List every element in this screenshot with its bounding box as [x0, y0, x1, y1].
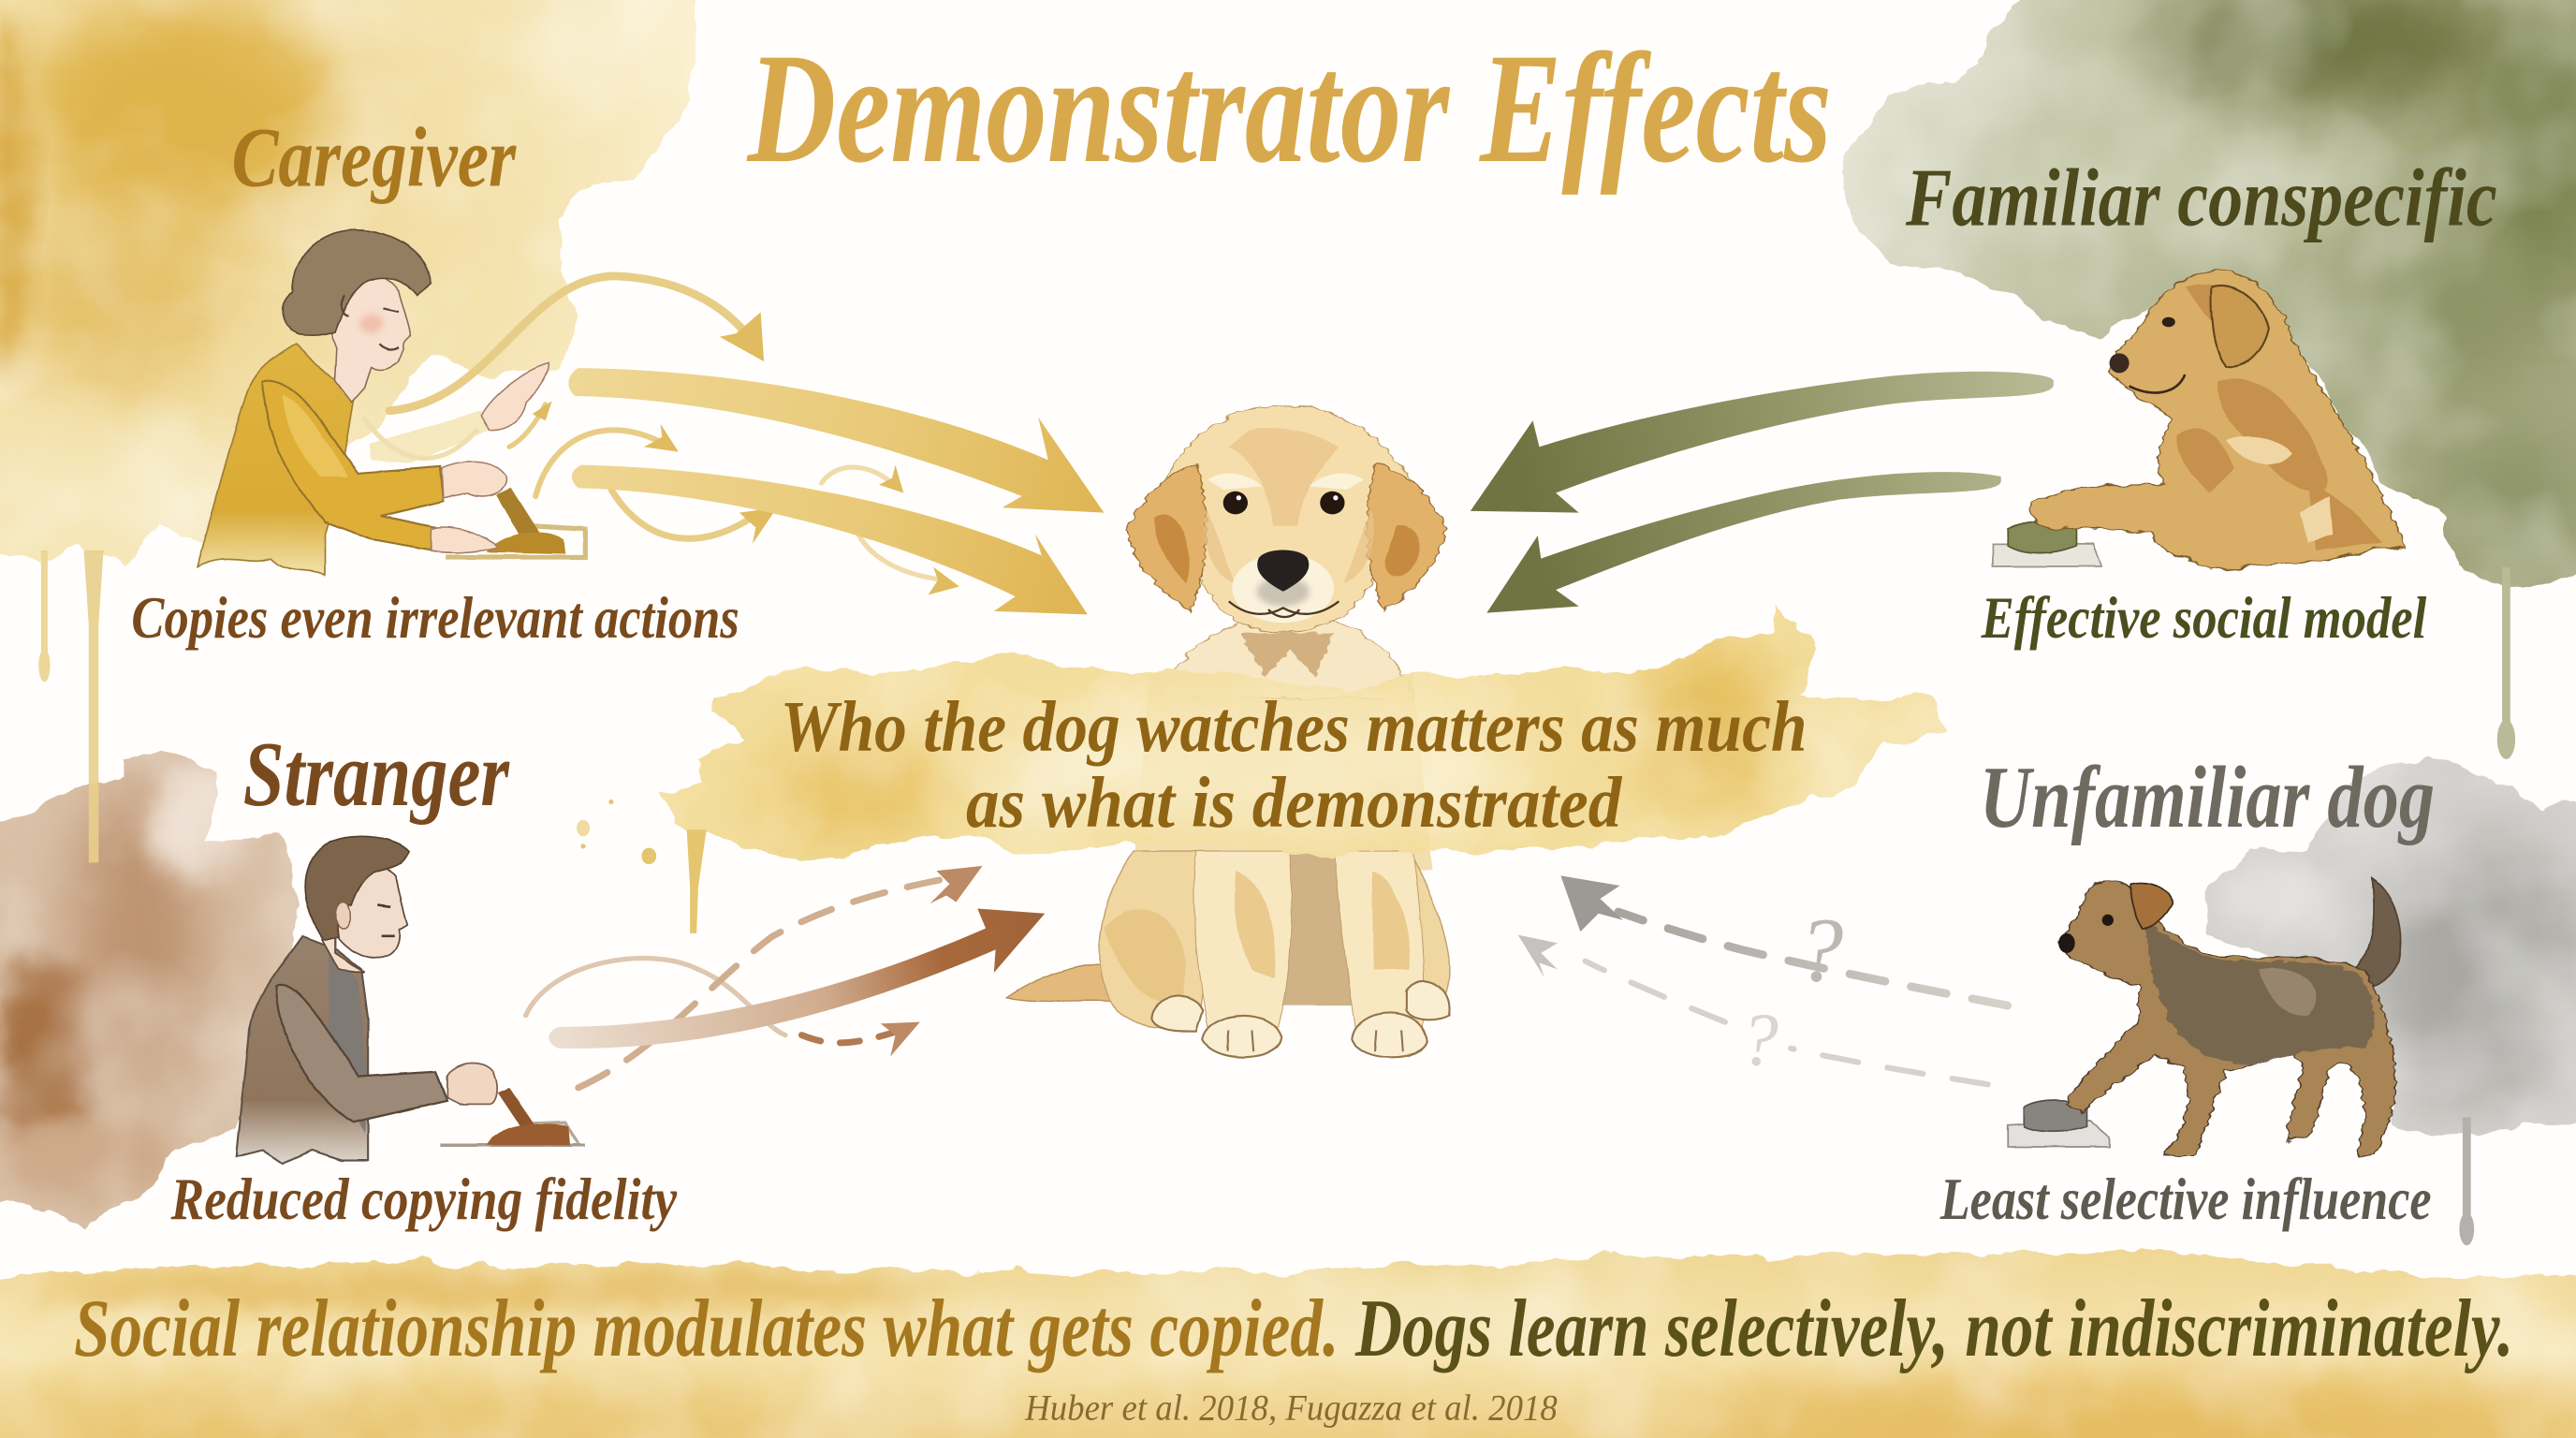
caregiver hair [283, 230, 431, 336]
stranger body [237, 936, 368, 1164]
arrows: conspecific to puppy [1471, 372, 2054, 613]
question mark upper: ? [1797, 900, 1843, 1002]
dashed upper trail [1618, 912, 2008, 1005]
stranger vest [329, 949, 368, 1134]
terrier saddle coat [2145, 920, 2374, 1064]
caregiver raised sleeve [370, 411, 490, 463]
arrowheads [1560, 875, 1623, 932]
heading: stranger: Stranger [243, 724, 510, 826]
title: Demonstrator Effects [746, 22, 1832, 196]
puppy neck shading [1240, 633, 1334, 677]
dashed trail up [578, 879, 944, 1088]
button device: terrier [2008, 1100, 2110, 1147]
banner text [781, 686, 1808, 843]
stranger ear [336, 902, 351, 929]
stranger arm [276, 985, 446, 1123]
arrowheads [881, 866, 983, 1056]
puppy eyes [1223, 492, 1345, 514]
small swirl arrowheads [533, 312, 959, 594]
puppy head base [1164, 405, 1412, 632]
caption: familiar conspecific: Effective social model [1981, 585, 2427, 651]
main arrow two [1486, 472, 2001, 613]
footer takeaway: Social relationship modulates what gets copied. [74, 1283, 1339, 1373]
caregiver cheek [359, 314, 383, 333]
conspecific body [2030, 271, 2404, 570]
small swirl arrows [365, 276, 944, 580]
question mark lower: ? [1741, 998, 1778, 1081]
caregiver sleeve highlight [283, 394, 348, 477]
terrier coat highlights [2259, 968, 2316, 1016]
arrows: unfamiliar dog to puppy [1518, 875, 2008, 1084]
puppy chest ruff [1162, 621, 1412, 698]
caregiver neck and face [329, 271, 411, 403]
main arrow one [568, 368, 1104, 513]
caption: caregiver: Copies even irrelevant actions [131, 585, 739, 651]
puppy left ear [1127, 463, 1207, 611]
watercolor wash: unfamiliar dog grey [2204, 756, 2576, 1137]
stranger hand [446, 1063, 497, 1104]
watercolor wash: familiar conspecific green [1808, 0, 2576, 592]
heading: unfamiliar dog: Unfamiliar dog [1980, 749, 2435, 846]
central message banner [577, 592, 1971, 933]
terrier tail [2356, 879, 2401, 986]
drips: caregiver wash [38, 550, 104, 862]
drip: grey wash [2459, 1117, 2474, 1245]
dashed lower trail [1586, 961, 1988, 1084]
puppy mouth [1229, 601, 1339, 617]
conspecific fur shading [2177, 285, 2382, 550]
button device: conspecific [1993, 521, 2101, 566]
puppy ear shading [1155, 514, 1420, 583]
puppy brow highlights [1208, 474, 1364, 490]
main arrow [549, 909, 1045, 1049]
figure: stranger [237, 836, 585, 1164]
button device: stranger [440, 1088, 585, 1145]
button device: caregiver [446, 488, 585, 557]
citation: Huber et al. 2018, Fugazza et al. 2018 [1024, 1388, 1558, 1428]
banner drip and splatter [577, 800, 707, 933]
caregiver arm [263, 381, 444, 550]
terrier silhouette with legs [2060, 881, 2395, 1157]
puppy nose [1257, 550, 1309, 592]
arrows: caregiver to puppy [365, 276, 1104, 614]
terrier ear [2130, 883, 2172, 929]
figure: terrier unfamiliar dog [2008, 879, 2401, 1157]
arc trail [526, 959, 785, 1035]
caregiver body [198, 344, 355, 575]
conspecific chest highlight [2226, 436, 2333, 542]
watercolor wash: caregiver yellow [0, 0, 739, 592]
main arrow one [1471, 372, 2054, 513]
puppy lower body [1099, 674, 1449, 1028]
watercolor wash: stranger brown [0, 751, 300, 1230]
dashed trail low [801, 1032, 896, 1043]
conspecific eye nose mouth [2110, 317, 2185, 392]
stranger hair [305, 836, 409, 940]
puppy paws [1151, 981, 1450, 1057]
central puppy [1007, 405, 1450, 1057]
arrows: stranger to puppy [526, 866, 1045, 1088]
banner text: as what is demonstrated [966, 762, 1623, 843]
main arrow two [572, 465, 1088, 614]
puppy muzzle [1232, 553, 1334, 623]
heading: caregiver: Caregiver [231, 110, 517, 204]
puppy right ear [1368, 463, 1445, 611]
terrier eye and nose [2058, 915, 2114, 953]
stranger head [322, 866, 407, 973]
stranger eye and mouth [378, 905, 394, 936]
banner wash [659, 605, 1947, 861]
caregiver eye and smile [342, 296, 399, 349]
figure: golden conspecific dog [1993, 271, 2404, 570]
caregiver hands [431, 363, 549, 552]
conspecific ear [2211, 286, 2269, 367]
drip: green wash [2497, 566, 2515, 759]
footer takeaway [74, 1283, 2513, 1373]
puppy tail [1007, 964, 1120, 1003]
caption: unfamiliar dog: Least selective influence [1939, 1167, 2432, 1232]
puppy eye highlights [1237, 495, 1339, 500]
footer wash band [0, 1249, 2576, 1438]
banner text: Who the dog watches matters as much [781, 686, 1808, 767]
figure: caregiver [198, 230, 585, 575]
caption: stranger: Reduced copying fidelity [170, 1167, 678, 1232]
puppy face markings [1205, 428, 1374, 583]
puppy muzzle shadow [1257, 577, 1310, 607]
